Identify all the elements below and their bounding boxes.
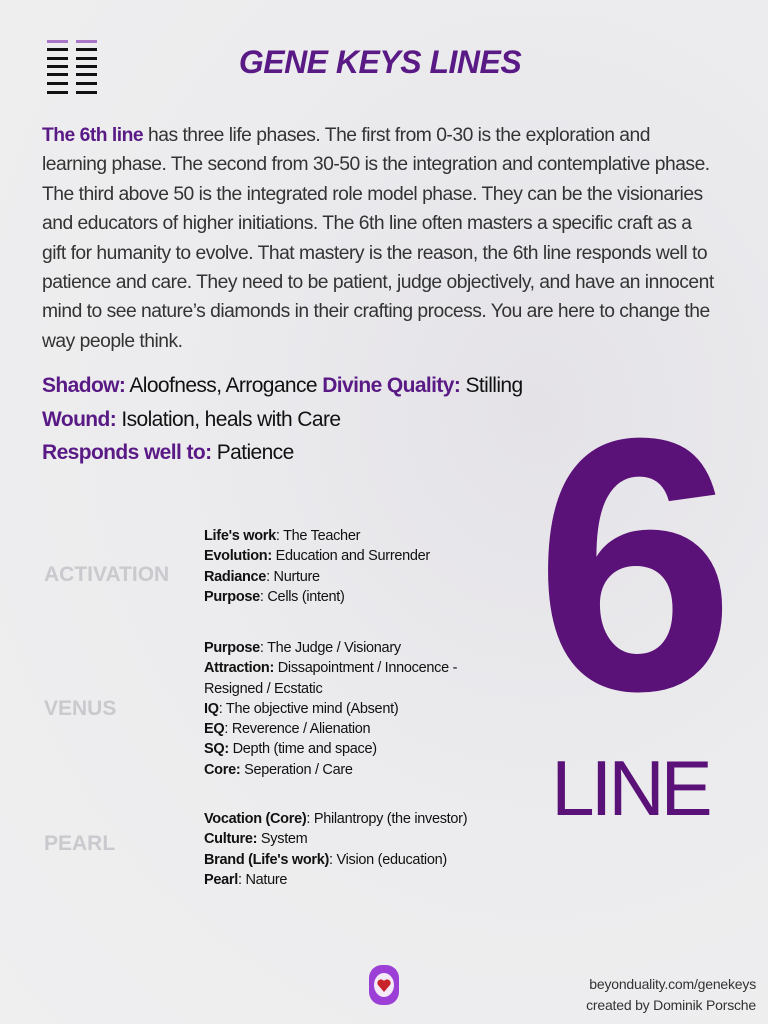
- text block: description: [42, 125, 714, 352]
- panel: pearl: Culture: System: [204, 831, 307, 847]
- panel: activation: Purpose: Cells (intent): [204, 589, 345, 605]
- panel: pearl: Pearl: Nature: [204, 872, 287, 888]
- text block: shadow / wound / responds: Wound: Isolation, heals with Care: [42, 408, 340, 430]
- label: pearl: PEARL: [44, 832, 115, 855]
- text block: description: learning phase. The second from 30-50 is the integration and contemplative phase.: [42, 154, 710, 175]
- label: venus: VENUS: [44, 697, 116, 720]
- text block: description: patience and care. They need to be patient, judge objectively, and have an innocent: [42, 272, 714, 293]
- footer credits: created by Dominik Porsche: [586, 997, 756, 1013]
- text block: description: The 6th line has three life phases. The first from 0-30 is the exploration and: [42, 125, 650, 146]
- panel: venus: Purpose: The Judge / Visionary: [204, 640, 401, 656]
- text block: description: gift for humanity to evolve. That mastery is the reason, the 6th line responds well to: [42, 243, 707, 264]
- label LINE: LINE: [551, 744, 709, 832]
- panel: venus: SQ: Depth (time and space): [204, 741, 377, 757]
- icon: logo heart: [369, 965, 399, 1005]
- panel: activation: Evolution: Education and Surrender: [204, 548, 430, 564]
- text block: description: mind to see nature’s diamonds in their crafting process. You are here to change the: [42, 301, 710, 322]
- footer credits: beyonduality.com/genekeys: [589, 976, 756, 992]
- text block: description: and educators of higher initiations. The 6th line often masters a specific craft as a: [42, 213, 692, 234]
- panel: activation: Radiance: Nurture: [204, 569, 320, 585]
- big number 6: 6: [535, 364, 725, 766]
- text block: description: The third above 50 is the integrated role model phase. They can be the visionaries: [42, 184, 703, 205]
- panel: pearl: [204, 811, 467, 888]
- title: GENE KEYS LINES: [239, 44, 521, 80]
- panel: venus: Resigned / Ecstatic: [204, 681, 322, 697]
- panel: pearl: Vocation (Core): Philantropy (the investor): [204, 811, 467, 827]
- panel: pearl: Brand (Life's work): Vision (education): [204, 852, 447, 868]
- panel: activation: Life's work: The Teacher: [204, 528, 360, 544]
- panel: venus: EQ: Reverence / Alienation: [204, 721, 370, 737]
- panel: venus: IQ: The objective mind (Absent): [204, 701, 398, 717]
- label: activation: ACTIVATION: [44, 563, 169, 586]
- text block: shadow / wound / responds: Shadow: Aloofness, Arrogance Divine Quality: Stilling: [42, 374, 523, 397]
- footer credits: [586, 976, 756, 1013]
- text block: description: way people think.: [42, 331, 182, 352]
- panel: activation: [204, 528, 430, 605]
- text block: shadow / wound / responds: [42, 374, 523, 464]
- panel: venus: [204, 640, 457, 778]
- panel: venus: Core: Seperation / Care: [204, 762, 353, 778]
- panel: venus: Attraction: Dissapointment / Innocence -: [204, 660, 457, 676]
- text block: shadow / wound / responds: Responds well to: Patience: [42, 441, 294, 464]
- icon: hexagram lines: [47, 40, 97, 94]
